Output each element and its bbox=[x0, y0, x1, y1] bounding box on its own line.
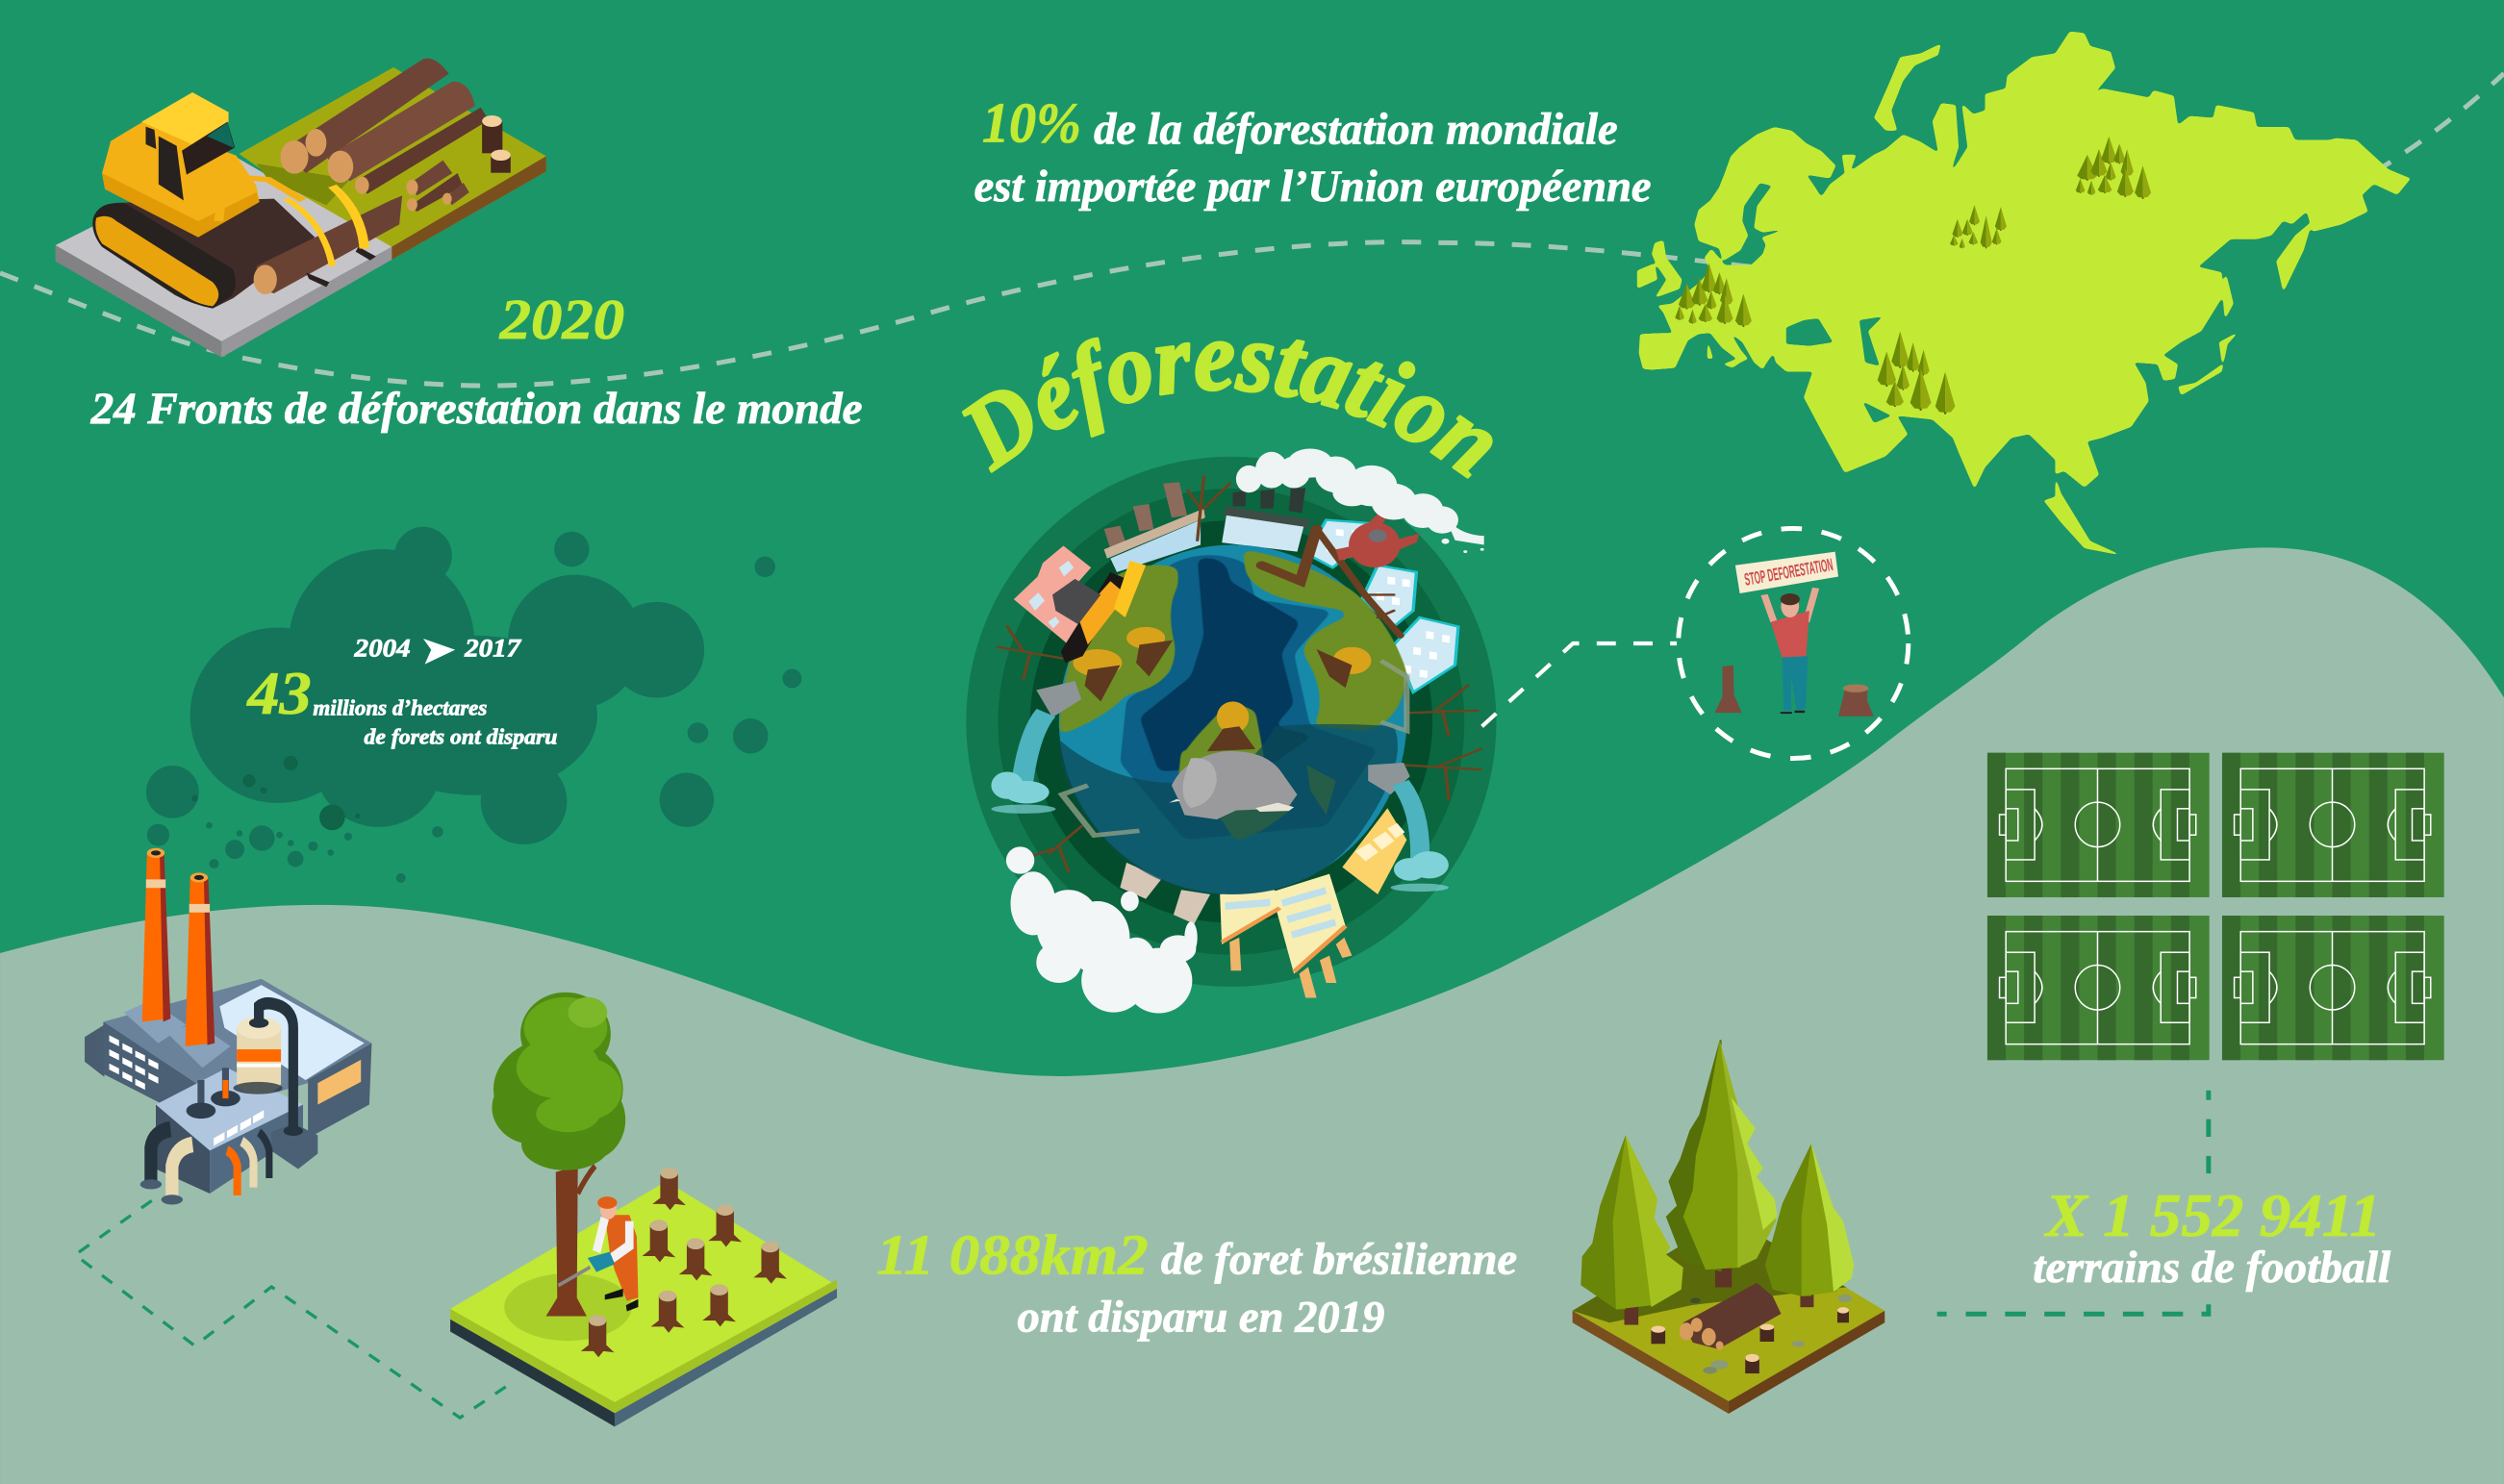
pine cluster: south Asia bbox=[1878, 331, 1955, 414]
left conifer bbox=[1581, 1135, 1683, 1325]
football fields bbox=[1987, 753, 2444, 1060]
illustration: log loader bbox=[56, 59, 546, 358]
pipes and waterfalls bbox=[991, 661, 1449, 892]
dead tree bbox=[1262, 529, 1401, 636]
text: 10% bbox=[974, 91, 1652, 212]
lumberjack bbox=[558, 1196, 638, 1311]
map: Eurasia bbox=[1637, 32, 2411, 556]
text: 11 088 km2: de foret brésilienne bbox=[1161, 1236, 1517, 1285]
tree bbox=[492, 993, 625, 1317]
smoke cloud bbox=[146, 527, 801, 883]
log pile bbox=[1651, 1283, 1852, 1374]
dashed connector to protester bbox=[1482, 643, 1677, 726]
pine cluster: Russia bbox=[2076, 137, 2151, 199]
buildings behind globe bbox=[1014, 482, 1458, 998]
elephant bbox=[1169, 751, 1298, 819]
dashed connector: text to forest bbox=[1937, 1304, 2209, 1314]
ocean bbox=[1059, 545, 1406, 894]
illustration: logger and stumps bbox=[450, 993, 837, 1426]
text: 24 fronts: 24 Fronts de déforestation dans le monde bbox=[90, 385, 862, 434]
pine cluster: central Asia bbox=[1950, 205, 2007, 248]
protester in dashed circle: STOP DEFORESTATION bbox=[1743, 554, 1834, 590]
text: football count: X 1 552 9411 bbox=[2043, 1182, 2381, 1249]
title: Déforestation bbox=[962, 337, 1493, 479]
tall conifer bbox=[1666, 1040, 1777, 1288]
text: 2004 to 2017: 2004 bbox=[353, 633, 411, 662]
dashed connector: fields to text bbox=[2207, 1091, 2210, 1175]
text: football count bbox=[2033, 1182, 2390, 1293]
heading: 2020: 2020 bbox=[499, 288, 624, 351]
smoke bottom bbox=[1006, 846, 1198, 1014]
sage hill bbox=[0, 547, 2504, 1484]
illustration: factory bbox=[85, 848, 371, 1204]
burnt stumps bbox=[1073, 627, 1372, 751]
text: 11 088 km2: ont disparu en 2019 bbox=[1017, 1293, 1384, 1342]
title: Déforestation: Déforestation bbox=[962, 337, 1493, 479]
smoke top bbox=[1236, 448, 1484, 553]
dashed timeline path bbox=[0, 73, 2504, 386]
protester in dashed circle bbox=[1679, 528, 1909, 759]
tree stumps bbox=[581, 1168, 787, 1357]
dashed connector: factory to tree bbox=[75, 1200, 515, 1418]
bulldozer bbox=[1052, 561, 1146, 663]
text: 11 088 km2 bbox=[876, 1223, 1517, 1342]
night shade bbox=[1059, 724, 1398, 894]
text: 43 millions bbox=[246, 660, 557, 750]
illustration: conifers on island bbox=[1573, 1040, 1884, 1414]
right conifer bbox=[1765, 1144, 1854, 1307]
text: 43 millions: 43 bbox=[246, 660, 312, 727]
bare branches bbox=[998, 477, 1480, 871]
text: 10%: est importée par l’Union européenne bbox=[974, 163, 1652, 212]
land masses bbox=[1059, 565, 1178, 736]
orangutan bbox=[1336, 504, 1420, 567]
illustration: globe bbox=[966, 448, 1496, 1014]
text: 10%: de la déforestation mondiale bbox=[1094, 105, 1618, 154]
text: 43 millions: millions d’hectares bbox=[313, 696, 487, 721]
text: football count: terrains de football bbox=[2033, 1244, 2390, 1293]
pine cluster: Europe bbox=[1675, 264, 1752, 327]
text: 2004 to 2017: 2017 bbox=[464, 633, 522, 662]
text: 10%: 10% bbox=[982, 91, 1081, 155]
text: 11 088 km2: 11 088km2 bbox=[876, 1223, 1149, 1287]
text: 43 millions: de forets ont disparu bbox=[365, 725, 557, 750]
text: 2004 to 2017 bbox=[353, 633, 522, 665]
